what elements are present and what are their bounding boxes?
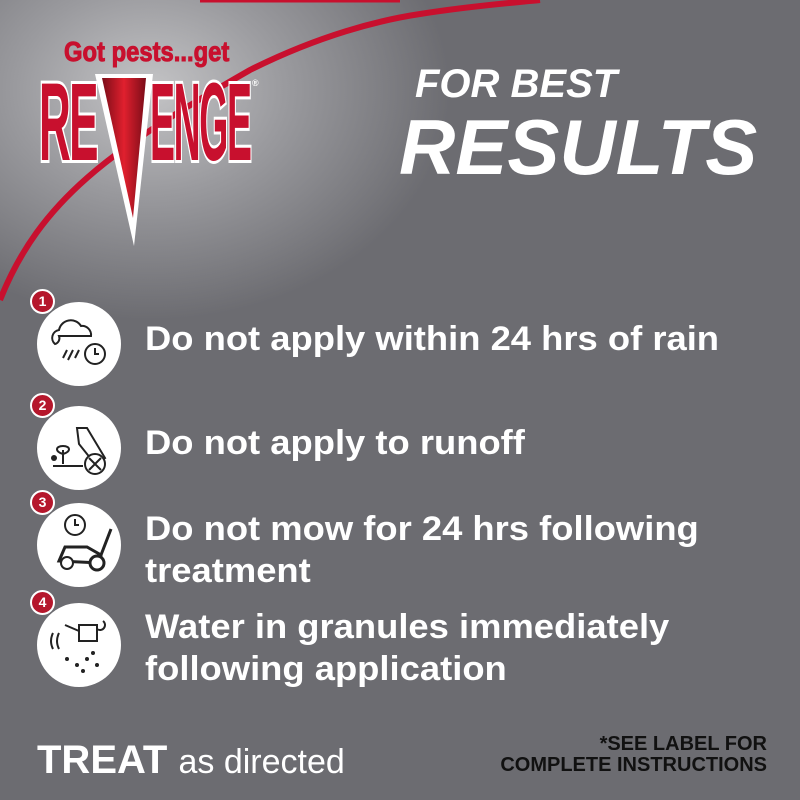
item 4 (30, 590, 669, 688)
item 2 (30, 393, 525, 490)
item 2: 2 (39, 397, 46, 413)
item 4: following application (145, 650, 507, 688)
logo: Got pests...get (64, 36, 229, 67)
logo: ® (252, 78, 259, 88)
item 4: Water in granules immediately (145, 608, 669, 646)
item 3: treatment (145, 552, 311, 590)
title (399, 62, 757, 191)
item 3 (30, 490, 699, 590)
item 1: 1 (39, 293, 46, 309)
title: FOR BEST (415, 62, 617, 106)
footer right: *SEE LABEL FOR (600, 733, 767, 755)
footer right: COMPLETE INSTRUCTIONS (500, 754, 767, 776)
item 1 (30, 289, 719, 386)
item 2: Do not apply to runoff (145, 424, 525, 462)
footer right (500, 733, 767, 776)
item 3: 3 (39, 494, 46, 510)
footer left: TREAT as directed (37, 738, 345, 782)
item 3: Do not mow for 24 hrs following (145, 510, 699, 548)
logo (39, 36, 259, 246)
item 4: 4 (39, 594, 46, 610)
logo: ENGE (150, 61, 251, 184)
item 1: Do not apply within 24 hrs of rain (145, 320, 719, 358)
logo: RE (39, 61, 97, 184)
title: RESULTS (399, 103, 757, 191)
